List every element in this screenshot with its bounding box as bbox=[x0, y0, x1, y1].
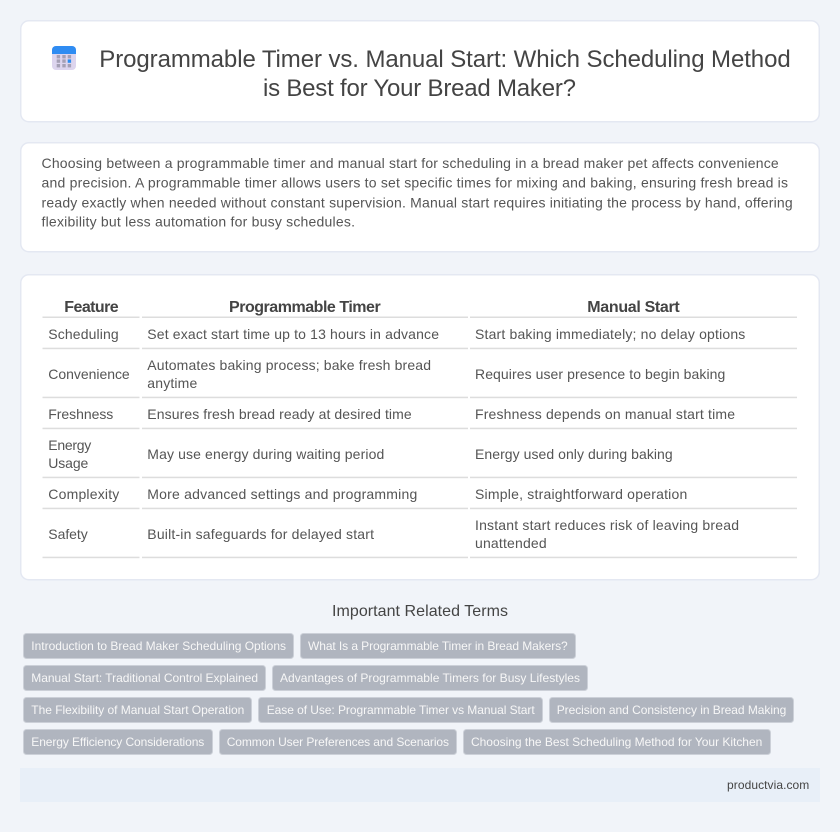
tag bbox=[464, 730, 770, 754]
tag: Precision and Consistency in Bread Making bbox=[557, 703, 786, 717]
table row: safety: Built-in safeguards for delayed start bbox=[147, 526, 374, 542]
table row: scheduling bbox=[42, 326, 797, 349]
panel: header bbox=[21, 21, 819, 122]
footer bbox=[20, 768, 820, 802]
footer: productvia.com bbox=[727, 778, 809, 792]
tag bbox=[550, 698, 794, 722]
tag bbox=[300, 634, 576, 658]
text block: introduction paragraph: and precision. A programmable timer allows users to set specific times for mixing and baking, ensuring fresh bread is bbox=[42, 174, 788, 190]
text block: introduction paragraph: flexibility but less automation for busy schedules. bbox=[42, 214, 355, 230]
table row: complexity: Simple, straightforward operation bbox=[475, 486, 687, 502]
tag: Advantages of Programmable Timers for Busy Lifestyles bbox=[280, 671, 580, 685]
tag bbox=[272, 666, 588, 690]
panel: introduction bbox=[21, 143, 819, 252]
table row: safety bbox=[42, 517, 797, 558]
panel: comparison table bbox=[21, 275, 819, 580]
table header row: Feature bbox=[64, 299, 119, 316]
table row: energy usage: Energy used only during baking bbox=[475, 446, 673, 462]
tag: Energy Efficiency Considerations bbox=[31, 735, 204, 749]
tag bbox=[24, 634, 294, 658]
table row: scheduling: Set exact start time up to 13 hours in advance bbox=[147, 326, 439, 342]
title: Programmable Timer vs. Manual Start: Which Scheduling Method bbox=[99, 46, 791, 73]
panel: related term tags bbox=[24, 634, 794, 754]
title: is Best for Your Bread Maker? bbox=[263, 75, 576, 102]
table row: convenience: Convenience bbox=[48, 366, 130, 382]
table row: energy usage: Usage bbox=[48, 455, 89, 471]
text block: introduction paragraph bbox=[42, 155, 793, 230]
tag bbox=[24, 730, 212, 754]
table row: convenience bbox=[42, 357, 797, 398]
tag: Ease of Use: Programmable Timer vs Manual Start bbox=[267, 703, 535, 717]
tag: The Flexibility of Manual Start Operation bbox=[31, 703, 244, 717]
tag bbox=[258, 698, 542, 722]
table row: safety: Safety bbox=[48, 526, 88, 542]
text block: introduction paragraph: ready exactly when needed without constant supervision. Manual start requires initiating the process by hand, offering bbox=[42, 194, 793, 210]
table row: energy usage: May use energy during waiting period bbox=[147, 446, 384, 462]
heading: important related terms: Important Related Terms bbox=[332, 603, 508, 620]
tag bbox=[24, 666, 266, 690]
table row: scheduling: Start baking immediately; no delay options bbox=[475, 326, 745, 342]
table row: energy usage: Energy bbox=[48, 437, 91, 453]
table row: convenience: Automates baking process; bake fresh bread bbox=[147, 357, 431, 373]
table header row: Programmable Timer bbox=[229, 299, 381, 316]
tag: Introduction to Bread Maker Scheduling Options bbox=[31, 639, 286, 653]
table row: complexity bbox=[42, 486, 797, 509]
table header row: Manual Start bbox=[587, 299, 680, 316]
tag: Common User Preferences and Scenarios bbox=[227, 735, 449, 749]
title bbox=[99, 46, 791, 102]
text block: introduction paragraph: Choosing between a programmable timer and manual start for scheduling in a bread maker pet affects convenience bbox=[42, 155, 779, 171]
table row: freshness: Freshness bbox=[48, 406, 113, 422]
table row: complexity: More advanced settings and programming bbox=[147, 486, 417, 502]
table row: convenience: anytime bbox=[147, 375, 198, 391]
table row: convenience: Requires user presence to begin baking bbox=[475, 366, 725, 382]
tag bbox=[220, 730, 456, 754]
table header row bbox=[42, 299, 797, 318]
table row: scheduling: Scheduling bbox=[48, 326, 119, 342]
table row: energy usage bbox=[42, 437, 797, 478]
tag: Choosing the Best Scheduling Method for Your Kitchen bbox=[471, 735, 762, 749]
table row: safety: Instant start reduces risk of leaving bread bbox=[475, 517, 739, 533]
table row: safety: unattended bbox=[475, 535, 547, 551]
tag: Manual Start: Traditional Control Explained bbox=[31, 671, 258, 685]
tag bbox=[24, 698, 252, 722]
table row: complexity: Complexity bbox=[48, 486, 119, 502]
table row: freshness bbox=[42, 406, 797, 429]
table row: freshness: Ensures fresh bread ready at desired time bbox=[147, 406, 412, 422]
tag: What Is a Programmable Timer in Bread Makers? bbox=[308, 639, 568, 653]
table row: freshness: Freshness depends on manual start time bbox=[475, 406, 735, 422]
icon: calendar bbox=[52, 46, 76, 70]
